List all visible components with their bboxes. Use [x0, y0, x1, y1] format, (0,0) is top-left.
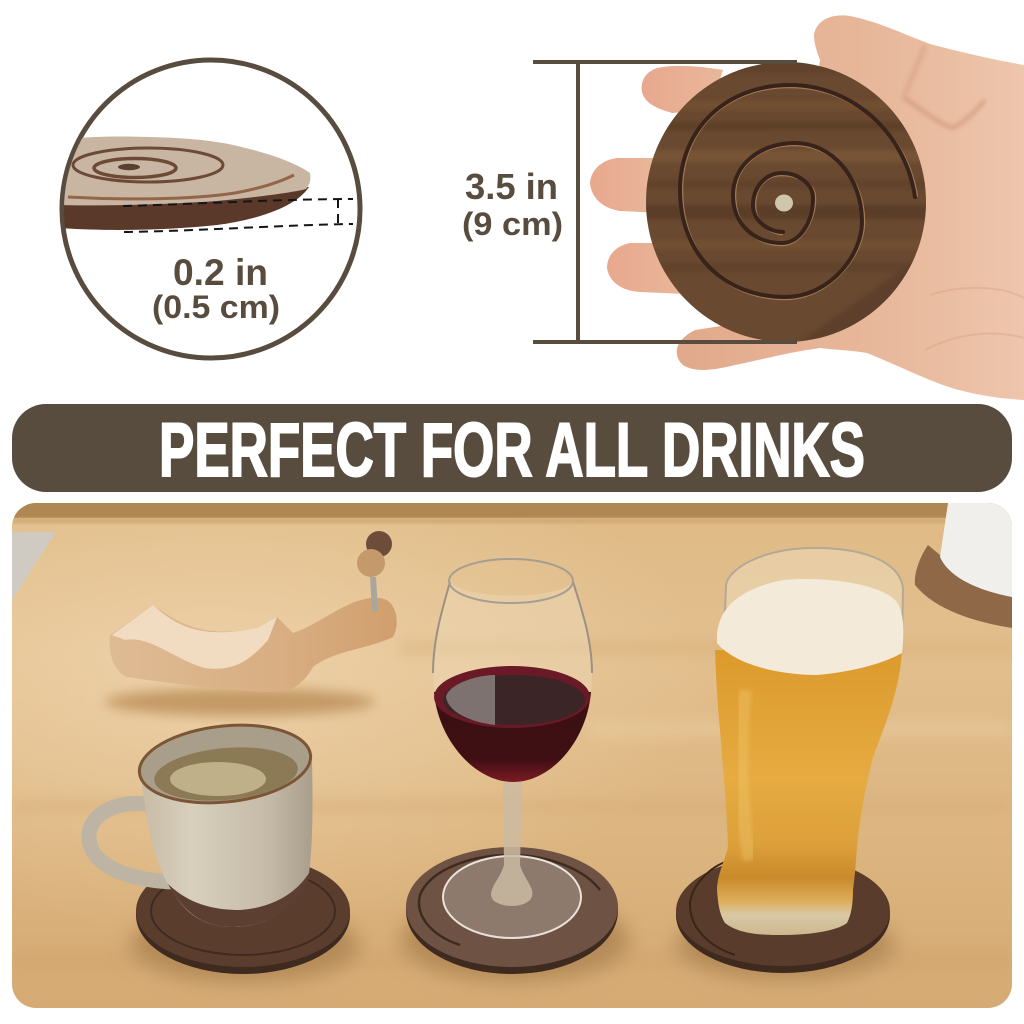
label: thickness: [152, 252, 280, 325]
label: diameter: [462, 166, 563, 242]
label: diameter: (9 cm): [462, 206, 563, 242]
wine glass on coaster: [400, 559, 630, 982]
thickness dashed guides: [123, 199, 353, 232]
icon: hand holding coaster: [590, 15, 1024, 400]
banner: [12, 404, 1012, 493]
paper towel holder: [915, 503, 1012, 628]
label: thickness: 0.2 in: [173, 252, 268, 293]
mug on coaster: [89, 717, 360, 983]
dimension bracket: [533, 62, 797, 342]
wooden snail holder: [105, 531, 397, 716]
label: diameter: 3.5 in: [465, 166, 558, 207]
coaster in hand: [640, 60, 930, 342]
beer glass on coaster: [675, 548, 903, 980]
panel: thickness detail circle: [60, 60, 360, 358]
panel: drinks photo: [12, 503, 1020, 1008]
label: thickness: (0.5 cm): [152, 289, 280, 325]
coaster side view: [60, 136, 310, 230]
